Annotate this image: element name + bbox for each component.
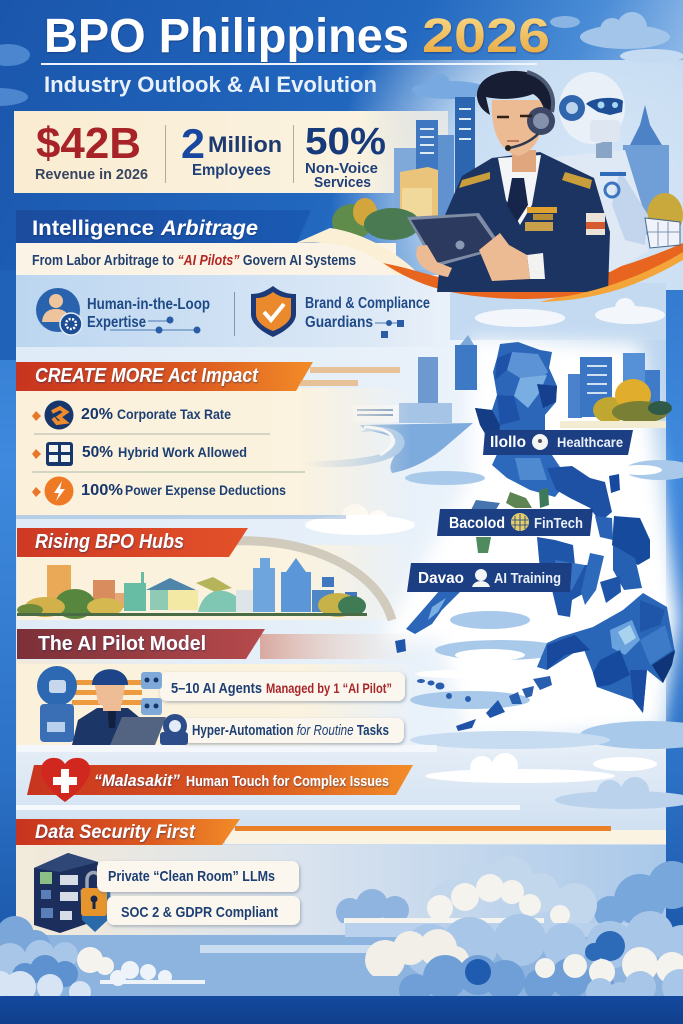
illustration: pilot [407, 71, 610, 292]
label: bacolod: FinTech [534, 515, 583, 532]
text: human in the loop [87, 296, 210, 334]
item: hybrid work: Hybrid Work Allowed [118, 444, 247, 460]
stat: revenue: Revenue in 2026 [35, 166, 148, 183]
item: hybrid work [32, 442, 247, 466]
map: mindanao [537, 593, 675, 713]
panel: data security [16, 819, 666, 950]
heading: data security: Data Security First [35, 822, 196, 843]
stat: non-voice [305, 121, 386, 191]
label: iloilo [483, 430, 633, 455]
pilot head [477, 71, 555, 156]
map: palawan [395, 590, 460, 653]
item: hybrid work: 50% [82, 444, 113, 461]
stat: employees: Employees [192, 162, 271, 179]
icon: human in the loop [36, 288, 82, 335]
map backdrop clouds [405, 460, 683, 749]
item: tax rate: 20% [81, 406, 113, 423]
heading: rising bpo hubs: Rising BPO Hubs [35, 531, 184, 553]
stat: employees: 2 [181, 120, 205, 167]
heading: intelligence arbitrage [16, 210, 311, 243]
heading: create more: CREATE MORE Act Impact [35, 365, 259, 387]
item: power expense [32, 476, 286, 506]
city right of map [560, 353, 672, 428]
clouds mid band right [425, 753, 683, 809]
title: BPO Philippines [44, 10, 409, 63]
heading: ai pilot model [17, 629, 265, 659]
swoosh cream [296, 228, 420, 275]
pill: ai agents: Managed by 1 “AI Pilot” [266, 680, 392, 696]
icon: shield [251, 286, 296, 337]
pill: clean room: Private “Clean Room” LLMs [108, 868, 275, 885]
bottom band [0, 996, 683, 1024]
title: 2026 [422, 10, 550, 63]
illustration: swoosh front [540, 252, 683, 302]
subtitle: Industry Outlook & AI Evolution [44, 72, 377, 97]
cityscape behind pilot [332, 97, 683, 240]
pill: soc 2 gdpr: SOC 2 & GDPR Compliant [121, 904, 278, 921]
panel: create more act [16, 362, 411, 519]
text: brand and compliance [305, 295, 430, 338]
stat: employees [181, 120, 282, 179]
item: tax rate [32, 400, 231, 430]
bottom clouds [0, 856, 683, 1006]
text: human in the loop: Human-in-the-Loop [87, 296, 210, 313]
label: davao [407, 563, 572, 592]
background clouds top [0, 12, 683, 106]
label: bacolod [437, 509, 593, 536]
pill: hyper-automation: Hyper-Automation for Routine Tasks [192, 723, 389, 739]
stat: non-voice: Non-Voice [305, 160, 378, 177]
panel: ai pilot model [17, 629, 437, 752]
arch [236, 541, 392, 620]
heading: intelligence arbitrage: Intelligence [32, 217, 154, 240]
pill: soc 2 gdpr [107, 896, 300, 925]
text: brand and compliance: Guardians [305, 314, 373, 331]
map: sulu islands [417, 676, 552, 731]
heading: data security [16, 819, 240, 845]
panel: stats band [14, 111, 448, 193]
map: luzon [475, 342, 620, 522]
map: philippines [395, 342, 675, 731]
heading: rising bpo hubs [17, 528, 248, 557]
skyline [17, 558, 367, 619]
banner: malasakit: Human Touch for Complex Issues [186, 773, 389, 790]
heading: create more [16, 362, 400, 391]
icon: heart [41, 758, 90, 802]
label: iloilo: Ilollo [490, 434, 526, 451]
heading: intelligence arbitrage: Arbitrage [160, 217, 258, 240]
text: human in the loop: Expertise [87, 314, 146, 331]
city left of map [353, 335, 477, 423]
stat: employees: Million [208, 132, 282, 157]
illustration: ai pilot team [37, 666, 188, 745]
panel: intelligence arbitrage [16, 210, 450, 347]
label: davao: Davao [418, 570, 464, 587]
item: power expense: Power Expense Deductions [125, 482, 286, 498]
label: iloilo: Healthcare [557, 434, 623, 450]
illustration: robot [548, 72, 680, 272]
subheading text: From Labor Arbitrage to “AI Pilots” Govern AI Systems [32, 252, 356, 269]
label: davao: AI Training [494, 570, 561, 587]
pill: ai agents [160, 672, 405, 701]
server and lock icon [34, 853, 112, 933]
banner: malasakit [16, 758, 520, 810]
stat: revenue: $42B [36, 119, 141, 168]
text: brand and compliance: Brand & Compliance [305, 295, 430, 312]
illustration: swoosh [383, 243, 683, 299]
river [288, 423, 473, 473]
item: tax rate: Corporate Tax Rate [117, 406, 231, 422]
panel: rising bpo hubs [17, 528, 412, 620]
pill: clean room [97, 861, 299, 892]
tablet [407, 213, 503, 267]
banner: malasakit: “Malasakit” [94, 771, 180, 790]
pill: ai agents: 5–10 AI Agents [171, 680, 262, 697]
stat: non-voice: 50% [305, 121, 386, 163]
item: power expense: 100% [81, 482, 123, 499]
pill: hyper-automation [180, 718, 404, 743]
stat: non-voice: Services [314, 174, 371, 191]
sky clouds right of intelligence panel [475, 298, 665, 327]
heading: ai pilot model: The AI Pilot Model [38, 633, 206, 655]
label: bacolod: Bacolod [449, 515, 505, 532]
map: visayas [470, 488, 650, 617]
